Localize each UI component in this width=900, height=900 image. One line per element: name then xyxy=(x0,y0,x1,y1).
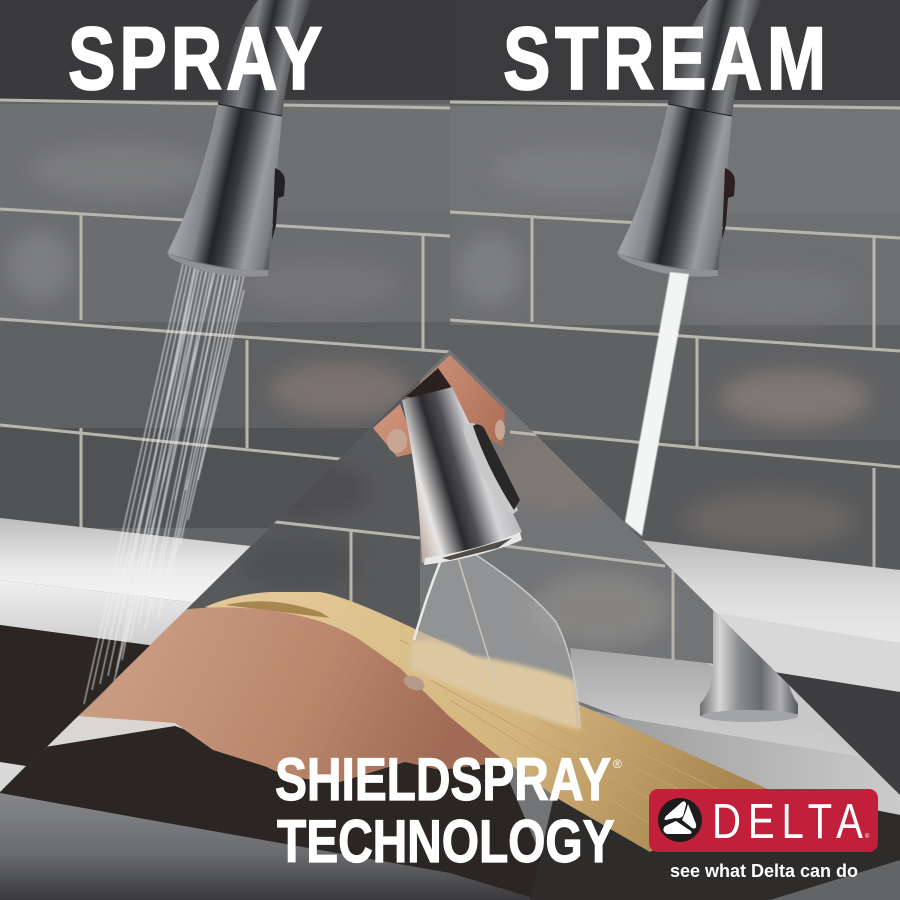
heading: stream: STREAM xyxy=(503,9,826,109)
icon: faucet head, stream mode xyxy=(617,0,763,277)
icon: sprayer head xyxy=(402,387,522,565)
hand gripping sprayer xyxy=(373,355,505,457)
heading: spray: SPRAY xyxy=(68,9,322,109)
heading: shieldspray: SHIELDSPRAY xyxy=(275,746,611,813)
tagline: see what Delta can do xyxy=(670,861,858,881)
panel: spray xyxy=(0,0,450,792)
water shield xyxy=(410,553,580,730)
registered mark: ® xyxy=(865,833,870,840)
countertop xyxy=(640,540,900,643)
heading: technology: TECHNOLOGY xyxy=(277,808,615,875)
sink basin xyxy=(0,726,560,900)
water spray streams xyxy=(84,264,245,704)
water stream xyxy=(625,272,689,536)
icon: fingernail on board xyxy=(404,676,424,690)
icon: faucet base xyxy=(700,600,798,722)
Delta wordmark: DELTA xyxy=(712,794,863,849)
hand holding board xyxy=(78,607,505,782)
logo: Delta xyxy=(649,789,878,852)
cutting board xyxy=(205,592,770,852)
panel: stream xyxy=(450,0,900,794)
counter xyxy=(570,648,880,776)
countertop xyxy=(0,518,251,602)
panel: sprayer close-up xyxy=(0,340,900,900)
registered mark: ® xyxy=(613,757,622,771)
icon: Delta triangle mark xyxy=(658,798,702,842)
lower counter sliver xyxy=(0,762,26,792)
board hollow and grain xyxy=(225,601,720,830)
icon: faucet head, spray mode xyxy=(167,0,313,277)
